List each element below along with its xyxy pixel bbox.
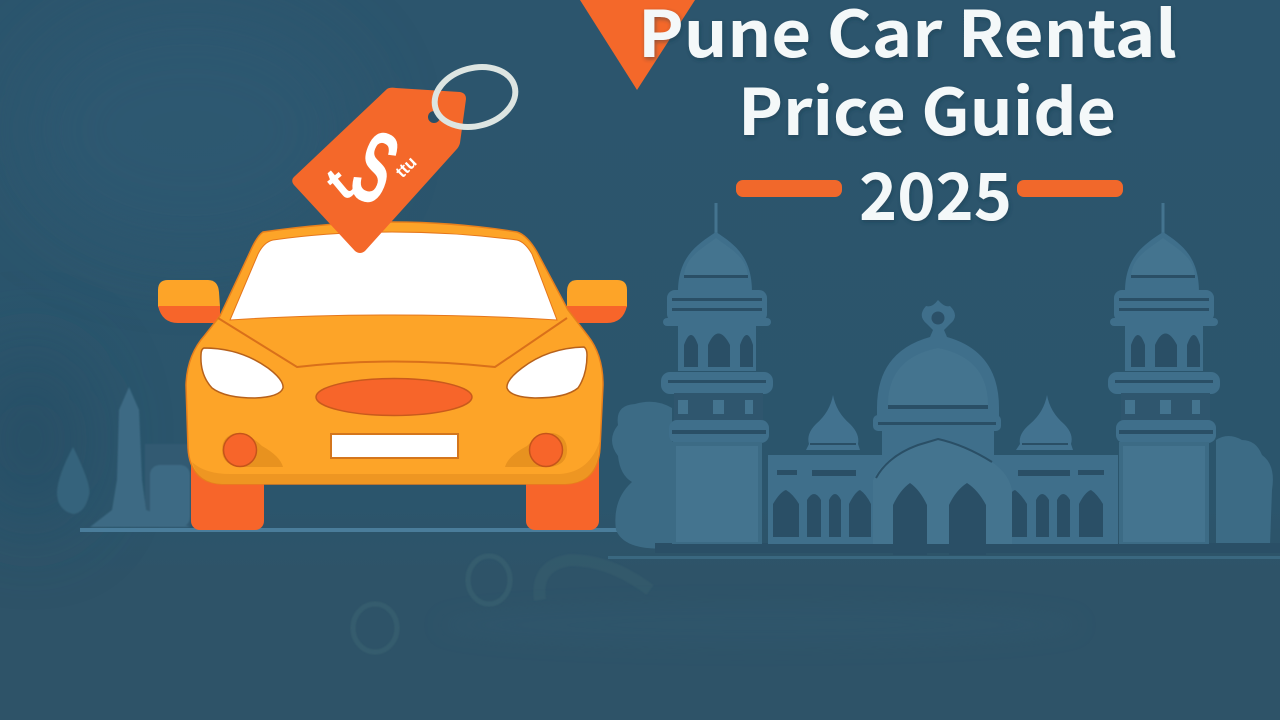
tag symbol: ttu [392, 153, 421, 182]
grille [316, 378, 472, 416]
tag symbol: t [315, 157, 364, 211]
small domes [806, 395, 1073, 450]
orange triangle accent [580, 0, 695, 90]
headlights [201, 347, 587, 398]
car illustration [158, 222, 627, 530]
tree silhouette [57, 447, 89, 514]
fog lights [222, 433, 567, 467]
central portal [873, 439, 1012, 555]
left background skyline [57, 387, 190, 527]
right tree [1216, 436, 1273, 548]
tag hole [428, 111, 440, 123]
tag ring [428, 58, 522, 136]
windshield [230, 232, 557, 320]
wheels [191, 450, 599, 530]
bumper shade [192, 440, 600, 484]
tower silhouette [90, 387, 190, 527]
left tree [612, 402, 672, 549]
right minaret [1108, 203, 1220, 544]
base plinth [655, 543, 1280, 553]
body [186, 222, 603, 484]
ground line left [80, 528, 655, 532]
title [638, 0, 1177, 239]
central dome [873, 300, 1001, 460]
right background: mosque skyline [608, 203, 1280, 559]
arched gate silhouette [145, 444, 190, 527]
year divider bars [736, 180, 1123, 197]
tag symbol: S [337, 108, 413, 228]
year: 2025 [859, 145, 1012, 239]
title: Price Guide [738, 62, 1116, 154]
ground line right [608, 556, 1280, 559]
main wall [768, 455, 1118, 544]
hood lines [218, 318, 567, 367]
licence plate [331, 434, 458, 458]
left minaret [661, 203, 773, 544]
mirrors [158, 280, 627, 323]
decorative faded tyres and road [353, 556, 650, 652]
price tag [292, 58, 522, 253]
